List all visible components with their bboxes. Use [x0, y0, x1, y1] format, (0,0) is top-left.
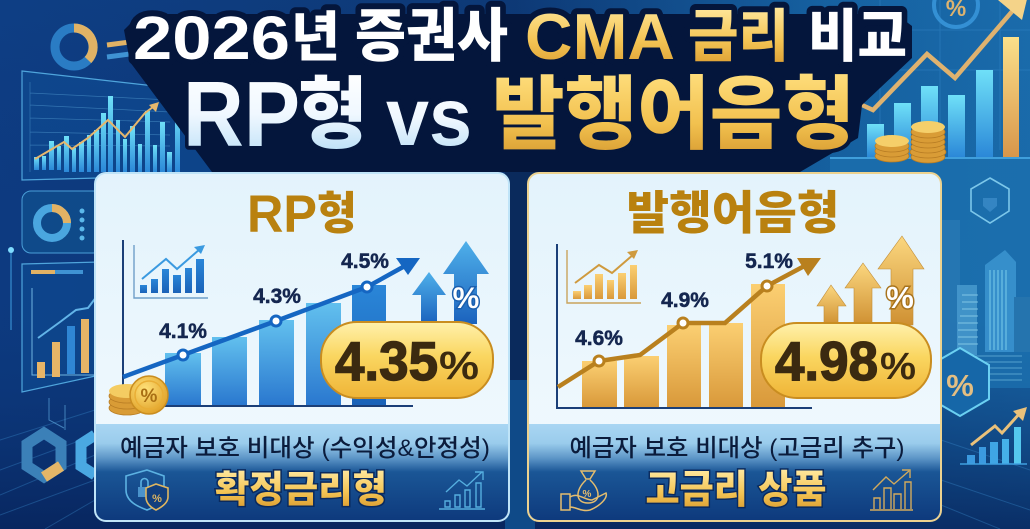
right decor: rising bar chart	[830, 0, 1030, 158]
title line 2: 형	[298, 70, 368, 158]
title line 2: 발행어음형	[492, 70, 855, 159]
right decor: city buildings	[942, 220, 1030, 380]
card body	[528, 173, 941, 521]
title line 2	[183, 62, 855, 166]
icon: outline growth chart	[439, 472, 485, 509]
title line 1: 금리	[688, 5, 789, 69]
footer note: 예금자 보호 비대상 (수익성&안정성)	[120, 435, 490, 462]
data labels: 5.1%	[745, 250, 793, 273]
title line 1: CMA	[525, 0, 675, 73]
icon: gold coins	[109, 376, 168, 415]
footer highlight: 고금리 상품	[646, 469, 826, 512]
left decor: hexagon links	[27, 398, 95, 477]
heading: RP형	[247, 185, 357, 244]
title line 1	[133, 0, 907, 73]
left decor: glowing node	[8, 247, 14, 330]
icon: mini bar chart	[567, 250, 641, 303]
left decor: donut legend	[55, 28, 130, 66]
icon: up arrows with percent: %	[453, 282, 479, 315]
callout: 4.98%	[761, 323, 931, 398]
title line 1: 비교	[808, 5, 907, 69]
title line 1: 2026	[133, 4, 290, 72]
icon: hand with money bag: %	[583, 489, 592, 500]
right decor: percent ring	[934, 0, 978, 27]
heading: RP형: 형	[317, 188, 357, 239]
panel: RP형	[95, 173, 509, 521]
right decor: percent hexagon	[941, 348, 989, 416]
data labels	[575, 250, 793, 350]
icon: up arrows with percent	[412, 241, 489, 324]
icon: up arrows with percent: %	[886, 280, 914, 315]
icon: mini bar chart	[134, 245, 208, 298]
callout: 4.35%: 4.35	[335, 330, 438, 392]
right decor: small trend chart	[960, 407, 1027, 464]
left decor: gold and blue bar panel	[22, 262, 100, 392]
card body	[95, 173, 509, 521]
data labels	[159, 250, 389, 343]
footer highlight: 확정금리형	[215, 469, 387, 510]
title line 2: RP	[183, 62, 300, 166]
icon: shield with percent: %	[152, 493, 162, 505]
callout: 4.35%	[321, 322, 493, 398]
footer band	[529, 424, 940, 520]
panel: 발행어음형	[528, 173, 941, 521]
data labels: 4.6%	[575, 327, 623, 350]
icon: up arrows with percent	[817, 236, 924, 325]
footer band	[96, 424, 508, 520]
icon: shield with percent	[126, 470, 168, 510]
title line 1: 증권사	[355, 4, 508, 69]
left decor: bar chart panel	[22, 71, 215, 180]
data labels: 4.1%	[159, 320, 207, 343]
title line 2: vs	[386, 72, 472, 163]
right decor: gold coin stacks	[875, 121, 946, 163]
heading: 발행어음형: 발행어음형	[626, 187, 840, 239]
line and bar chart	[123, 240, 420, 406]
data labels: 4.3%	[253, 285, 301, 308]
callout: 4.35%: %	[439, 344, 479, 388]
data labels: 4.9%	[661, 289, 709, 312]
right decor: hexagon shield outline	[971, 178, 1009, 223]
icon: gold coins: %	[141, 386, 158, 407]
data labels: 4.5%	[341, 250, 389, 273]
left decor: donut panel	[22, 191, 102, 253]
line and bar chart	[557, 244, 821, 408]
footer note: 예금자 보호 비대상 (고금리 추구)	[570, 435, 904, 462]
callout: 4.98%: 4.98	[775, 330, 878, 392]
icon: outline growth chart	[870, 470, 913, 510]
title banner backing	[124, 14, 912, 172]
callout: 4.98%: %	[880, 346, 916, 388]
icon: hand with money bag	[561, 471, 606, 510]
right decor: percent hexagon: %	[946, 368, 974, 403]
heading: RP형: RP	[247, 185, 317, 244]
title line 1: 년	[291, 8, 340, 68]
